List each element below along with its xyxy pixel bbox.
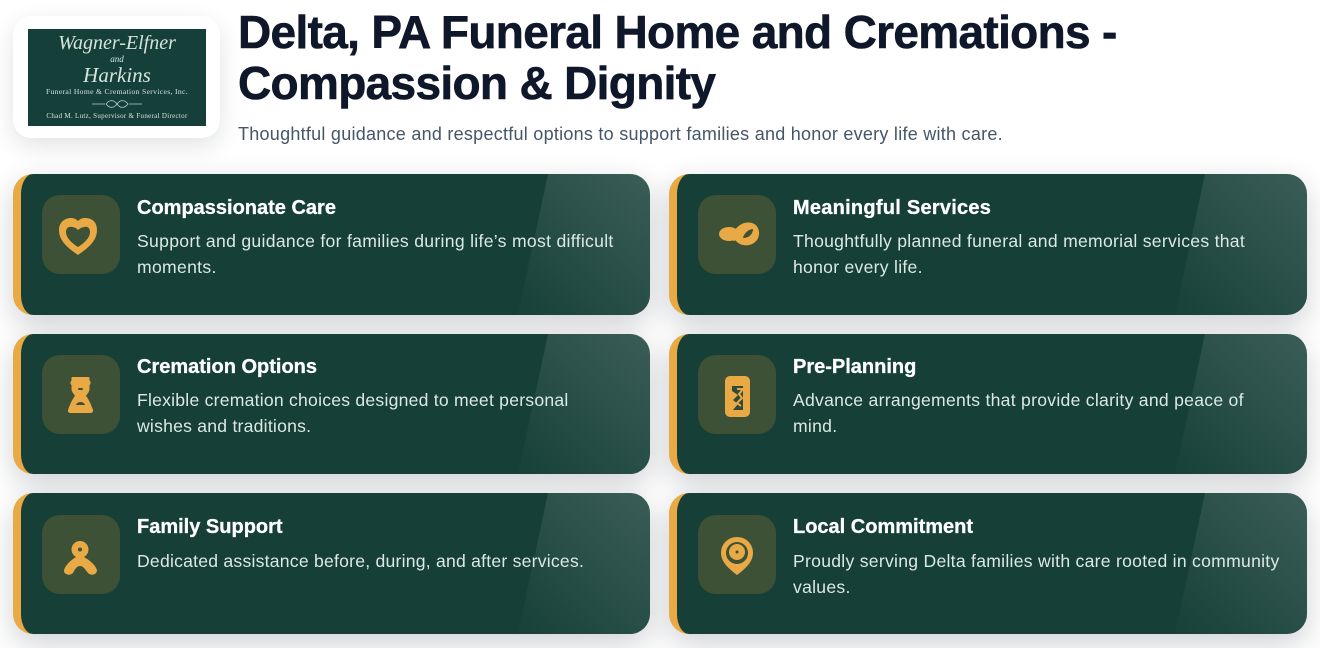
panel: Meaningful Services xyxy=(669,174,1307,315)
description: Advance arrangements that provide clarity and peace of xyxy=(793,390,1244,410)
panel: Compassionate Care xyxy=(13,174,650,315)
heading: Family Support xyxy=(137,516,283,538)
logo: Chad M. Lutz, Supervisor & Funeral Director xyxy=(46,112,188,120)
description xyxy=(137,231,614,277)
title: Delta, PA Funeral Home and Cremations - xyxy=(238,6,1117,58)
panel: Family Support xyxy=(13,493,650,634)
description: Support and guidance for families during life’s most difficult xyxy=(137,231,614,251)
description: moments. xyxy=(137,257,217,277)
heading: Meaningful Services xyxy=(793,197,991,219)
panel: Cremation Options xyxy=(13,334,650,474)
heading: Compassionate Care xyxy=(137,197,336,219)
description: Proudly serving Delta families with care rooted in community xyxy=(793,551,1280,571)
logo: Funeral Home & Cremation Services, Inc. xyxy=(46,87,188,96)
panel: Local Commitment xyxy=(669,493,1307,634)
title: Compassion & Dignity xyxy=(238,57,715,109)
logo: Wagner-Elfner xyxy=(58,32,176,54)
description xyxy=(137,390,569,436)
description xyxy=(793,551,1280,597)
subtitle: Thoughtful guidance and respectful options to support families and honor every life with care. xyxy=(238,124,1003,144)
description xyxy=(793,231,1245,277)
heading: Cremation Options xyxy=(137,356,317,378)
logo xyxy=(13,16,220,138)
description: mind. xyxy=(793,416,837,436)
heading: Pre-Planning xyxy=(793,356,916,378)
icon: heart xyxy=(42,195,120,274)
logo: and xyxy=(110,54,124,64)
heading: Local Commitment xyxy=(793,516,973,538)
icon: map pin xyxy=(698,515,776,594)
panel: Pre-Planning xyxy=(669,334,1307,474)
icon: person xyxy=(42,515,120,594)
description: Dedicated assistance before, during, and after services. xyxy=(137,551,584,571)
title xyxy=(238,6,1117,109)
description: Thoughtfully planned funeral and memorial services that xyxy=(793,231,1245,251)
description xyxy=(793,390,1244,436)
description: Flexible cremation choices designed to meet personal xyxy=(137,390,569,410)
description: values. xyxy=(793,577,851,597)
logo: Harkins xyxy=(83,63,151,87)
description: wishes and traditions. xyxy=(137,416,311,436)
icon: infinity knot xyxy=(698,195,776,274)
description: honor every life. xyxy=(793,257,923,277)
icon: document xyxy=(698,355,776,434)
icon: hourglass xyxy=(42,355,120,434)
